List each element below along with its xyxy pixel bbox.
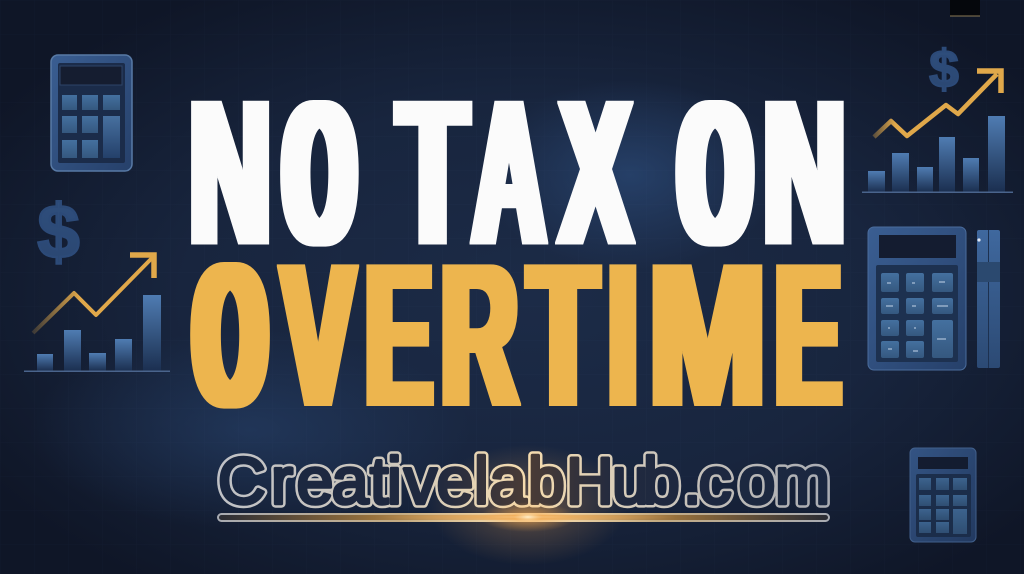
title line 2: E [776, 221, 841, 448]
icon: right calculator [868, 227, 966, 370]
chart: left rising bars and arrow [24, 255, 170, 372]
icon: side ruler strip [977, 230, 1000, 368]
logo wordmark: CreativelabHub.com [218, 444, 830, 518]
title line 1: X [560, 58, 631, 287]
chart: right rising bars and arrow [862, 71, 1013, 193]
title line 1: A [473, 59, 545, 288]
logo underline with flare [218, 502, 829, 532]
title line 2: T [529, 221, 598, 448]
title line 2: I [608, 223, 637, 449]
logo glow [428, 445, 628, 565]
icon: right dollar sign: $ [929, 40, 959, 99]
logo wordmark: CreativelabHub.com [218, 444, 830, 518]
title line 2 [192, 221, 841, 470]
icon: left dollar sign: $ [37, 190, 80, 275]
title line 2: E [366, 221, 432, 448]
icon: bottom calculator [910, 448, 976, 542]
title line 1: O [677, 66, 753, 308]
title line 1: O [282, 66, 357, 308]
title line 2: M [649, 221, 766, 448]
icon: left calculator [51, 55, 132, 171]
title line 1: N [764, 59, 845, 288]
title line 1 [190, 58, 845, 308]
title line 1: T [398, 58, 468, 288]
title line 2: V [282, 223, 354, 449]
title line 1: N [190, 58, 271, 288]
title line 2: O [192, 228, 268, 470]
title line 2: R [441, 223, 517, 449]
top black notch [950, 0, 980, 16]
